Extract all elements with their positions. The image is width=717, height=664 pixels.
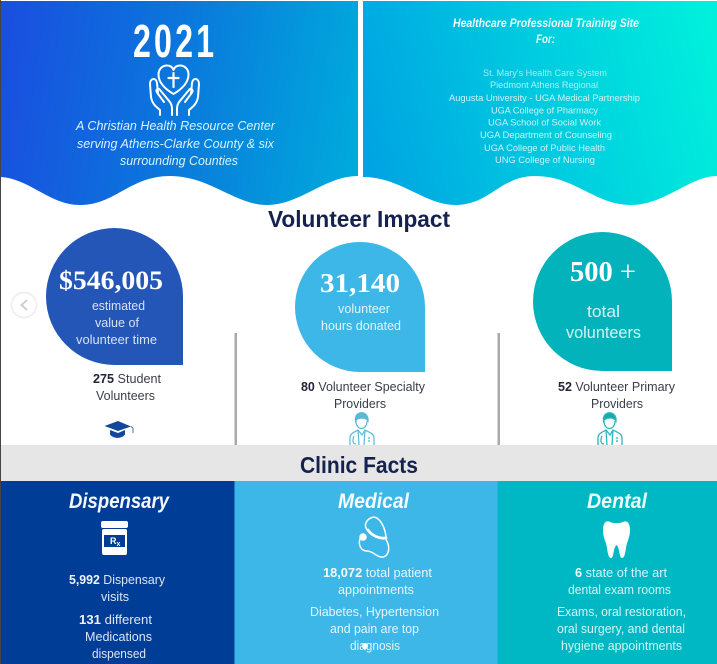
stat card: volunteer hours <box>295 242 425 372</box>
panel: Medical <box>234 481 498 664</box>
training site list: UGA College of Public Health <box>484 143 605 154</box>
Medical stats: and pain are top <box>330 621 419 636</box>
icon: stethoscope <box>359 517 389 557</box>
Medical stats: appointments <box>338 582 414 597</box>
mission statement: A Christian Health Resource Center <box>75 119 276 133</box>
training site heading <box>453 18 640 46</box>
training site list: Augusta University - UGA Medical Partnership <box>449 93 640 104</box>
training site list: UNG College of Nursing <box>495 155 595 166</box>
training site heading: Healthcare Professional Training Site <box>453 18 640 30</box>
stat card: volunteer time value: $546,005 <box>59 266 163 295</box>
student volunteers label: Volunteers <box>96 388 155 403</box>
stat card: volunteer time value: volunteer time <box>76 332 157 347</box>
student volunteers label <box>93 371 161 403</box>
Dispensary stats: 131 different <box>79 612 152 627</box>
specialty providers label: Providers <box>334 396 386 411</box>
Dental stats <box>557 565 686 653</box>
stat card: total volunteers: volunteers <box>566 323 641 342</box>
Medical stats: Diabetes, Hypertension <box>310 604 439 619</box>
stat card: volunteer hours: volunteer <box>338 301 391 316</box>
Dental stats: 6 state of the art <box>575 565 667 580</box>
primary providers label: Providers <box>591 396 643 411</box>
panel: Dispensary <box>1 481 234 664</box>
training site heading: For: <box>536 34 555 46</box>
training site list: Piedmont Athens Regional <box>490 80 598 91</box>
icon: prescription bottle <box>101 521 128 555</box>
stat card: total volunteers: total <box>587 302 620 321</box>
stat card: total volunteers <box>533 232 672 371</box>
stat card: volunteer hours: hours donated <box>321 318 401 333</box>
student volunteers label: 275 Student <box>93 371 161 386</box>
training site list: UGA School of Social Work <box>488 118 601 128</box>
Medical stats <box>310 565 439 653</box>
icon: hands holding heart with cross <box>150 66 199 115</box>
year heading: 2021 <box>133 16 217 67</box>
heading: Volunteer Impact: Volunteer Impact <box>268 206 450 232</box>
Medical stats: diagnosis <box>350 638 400 653</box>
mission statement: surrounding Counties <box>120 154 238 168</box>
training site list: UGA Department of Counseling <box>480 130 612 141</box>
Dental stats: Exams, oral restoration, <box>557 604 686 619</box>
panel: Dental <box>498 481 717 664</box>
Dispensary stats: 5,992 Dispensary <box>69 572 165 587</box>
Dispensary stats <box>69 572 165 661</box>
Medical stats: 18,072 total patient <box>323 565 432 580</box>
stat card: volunteer time value: estimated <box>92 298 145 313</box>
Dental stats: oral surgery, and dental <box>557 621 685 636</box>
icon: primary doctor <box>598 413 622 445</box>
primary providers label <box>558 379 675 411</box>
Dispensary stats: visits <box>101 589 129 604</box>
training site list <box>449 68 640 166</box>
icon: graduation cap <box>104 421 133 438</box>
heading band: Clinic Facts: Clinic Facts <box>300 452 418 478</box>
panel: training sites banner <box>363 1 717 205</box>
mission statement <box>75 119 276 168</box>
Dispensary stats: dispensed <box>92 646 146 661</box>
specialty providers label <box>301 379 425 411</box>
training site list: UGA College of Pharmacy <box>491 106 598 116</box>
icon: prescription bottle: x <box>116 541 120 548</box>
Dental heading: Dental <box>587 490 648 513</box>
training site list: St. Mary's Health Care System <box>483 68 607 79</box>
panel: mission banner <box>1 1 358 205</box>
heading band: Clinic Facts <box>1 445 717 481</box>
mission statement: serving Athens-Clarke County & six <box>77 137 275 151</box>
icon: prescription bottle: R <box>110 536 116 546</box>
stat card: volunteer hours: 31,140 <box>320 268 400 298</box>
Medical heading: Medical <box>338 490 410 513</box>
carousel back button <box>12 292 36 318</box>
primary providers label: 52 Volunteer Primary <box>558 379 675 394</box>
Dental stats: dental exam rooms <box>568 582 671 597</box>
icon: tooth <box>603 521 630 558</box>
specialty providers label: 80 Volunteer Specialty <box>301 379 425 394</box>
Dispensary heading: Dispensary <box>69 490 170 513</box>
Dental stats: hygiene appointments <box>561 638 682 653</box>
icon: specialty doctor <box>350 413 374 445</box>
stat card: volunteer time value <box>46 228 183 365</box>
stat card: volunteer time value: value of <box>95 315 139 330</box>
stat card: total volunteers: 500 + <box>570 256 636 288</box>
Dispensary stats: Medications <box>85 629 152 644</box>
